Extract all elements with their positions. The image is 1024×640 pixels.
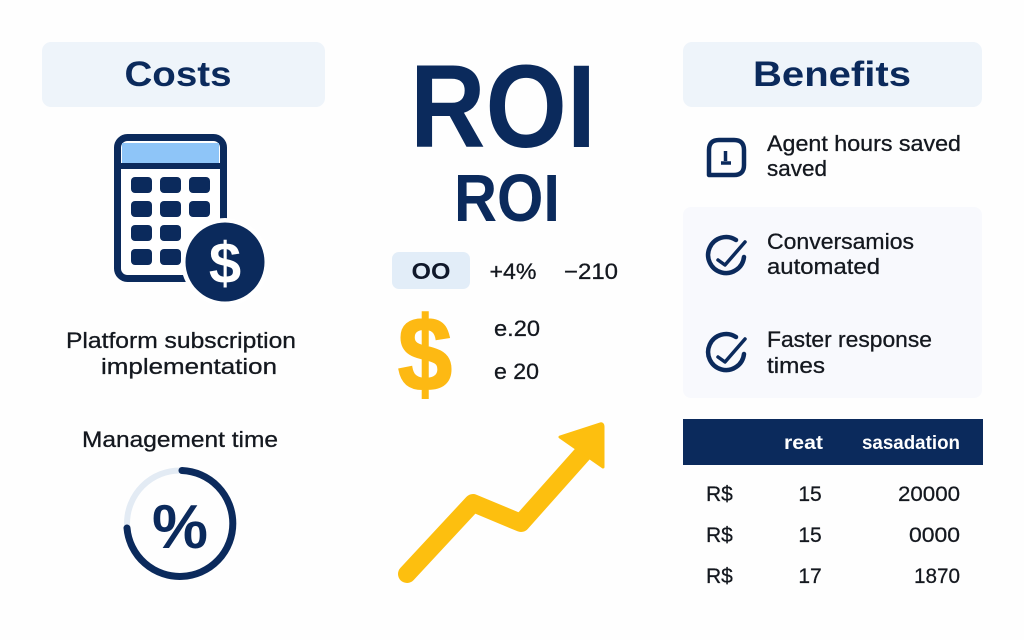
subtitle: ROI: ROI — [454, 161, 560, 236]
arrow: rising trend — [407, 424, 603, 574]
table row 3: R$ — [706, 565, 733, 588]
table row 3 — [706, 565, 960, 588]
text: faster response times — [767, 327, 932, 378]
text: faster response times: times — [767, 353, 825, 378]
metric badge — [392, 252, 470, 289]
icon: gold dollar: $ — [398, 296, 452, 413]
table row 2: R$ — [706, 524, 733, 547]
table row 2: 0000 — [909, 524, 960, 547]
metric badge: OO — [412, 258, 450, 284]
icon: clock bubble — [709, 140, 744, 175]
table row 2 — [706, 524, 960, 547]
heading: costs — [42, 42, 325, 107]
text: agent hours saved: Agent hours saved — [767, 131, 961, 156]
table row 3: 1870 — [914, 565, 960, 588]
text: conversations automated: automated — [767, 254, 880, 279]
table row 1: 15 — [798, 483, 822, 506]
table header: reat — [784, 433, 824, 454]
metric: +4%: +4% — [490, 259, 536, 284]
benefit list background — [683, 207, 982, 398]
text: conversations automated: Conversamios — [767, 229, 914, 254]
icon: check circle — [708, 334, 745, 370]
icon: check circle — [708, 237, 745, 273]
panel: costs — [42, 42, 325, 576]
table header: sasadation — [862, 433, 960, 454]
icon: calculator with dollar: $ — [209, 231, 241, 296]
heading: costs: Costs — [124, 55, 232, 94]
icon: calculator with dollar — [118, 138, 269, 306]
text: agent hours saved: saved — [767, 156, 827, 181]
table header — [683, 419, 983, 465]
text: agent hours saved — [767, 131, 961, 181]
value: e.20: e.20 — [494, 316, 540, 341]
value: e 20: e 20 — [494, 359, 539, 384]
heading: benefits: Benefits — [753, 55, 911, 94]
benefit: faster response times — [708, 327, 932, 378]
title: ROI: ROI — [410, 41, 596, 173]
text: conversations automated — [767, 229, 914, 279]
panel: benefits — [683, 42, 983, 588]
table — [683, 419, 983, 588]
table row 1: R$ — [706, 483, 733, 506]
text: faster response times: Faster response — [767, 327, 932, 352]
panel: ROI centre — [392, 41, 618, 574]
text: platform subscription: Platform subscription — [66, 328, 296, 353]
text: platform subscription — [66, 328, 296, 379]
table row 1 — [706, 483, 960, 506]
table row 3: 17 — [798, 565, 822, 588]
table row 2: 15 — [798, 524, 822, 547]
heading: benefits — [683, 42, 982, 107]
text: management time: Management time — [82, 427, 278, 452]
icon: percent ring — [127, 470, 233, 576]
benefit: conversations automated — [708, 229, 914, 279]
benefit: agent hours saved — [709, 131, 961, 181]
icon: percent ring: % — [152, 493, 208, 562]
text: platform subscription: implementation — [101, 354, 277, 379]
table row 1: 20000 — [898, 483, 960, 506]
metric: -210: −210 — [564, 259, 618, 284]
